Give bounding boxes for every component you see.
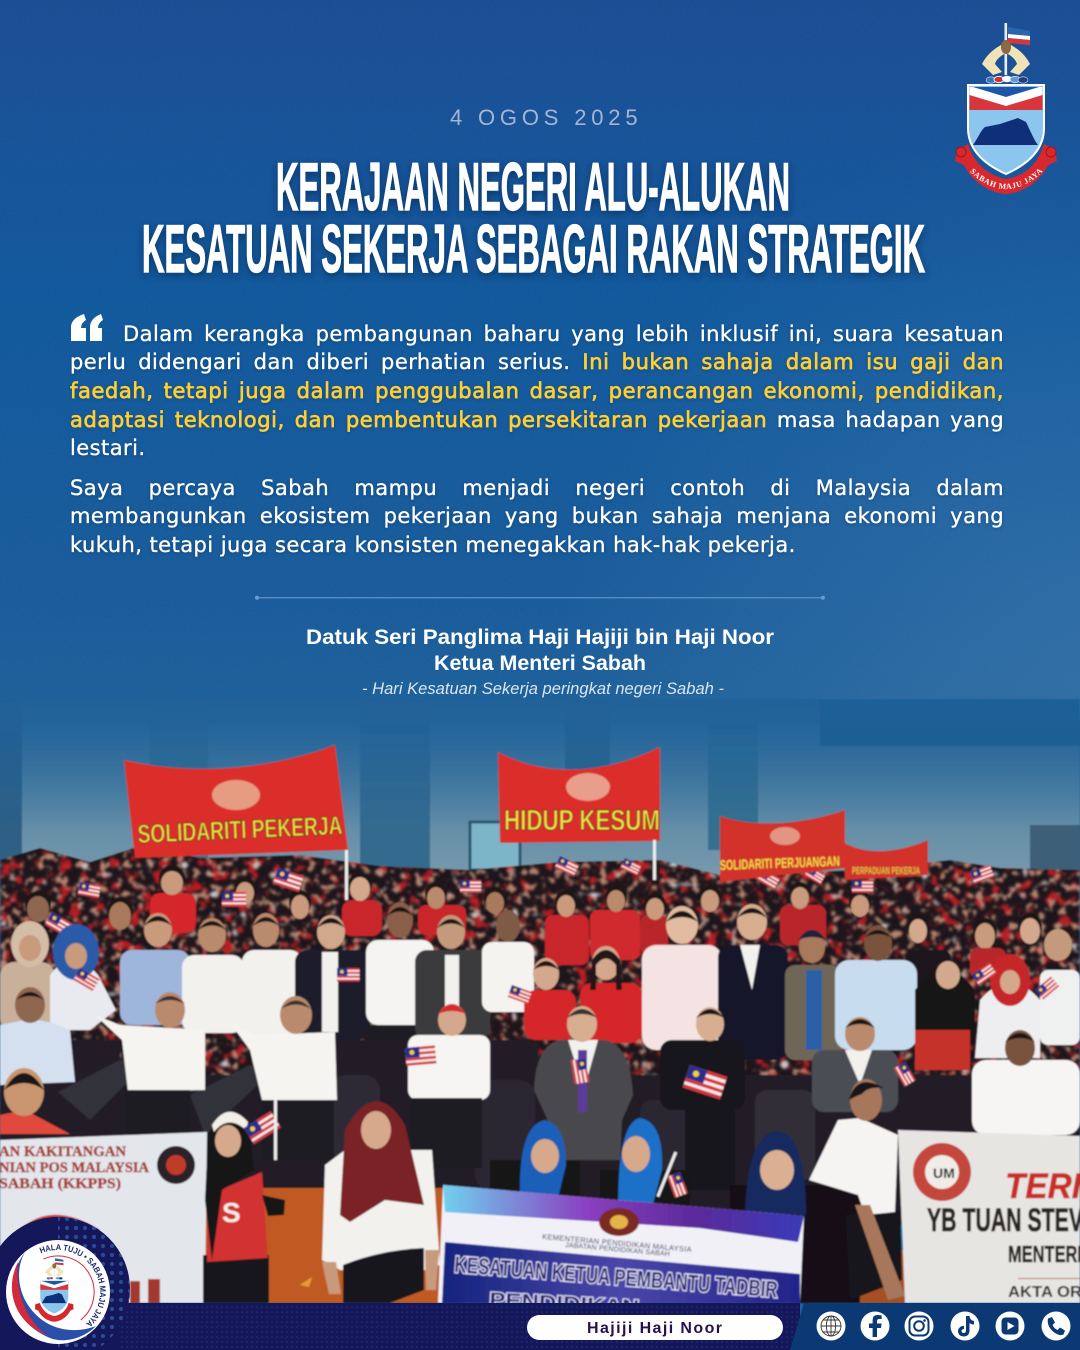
emblem: Sabah coat of arms [955,23,1057,194]
centre banner [438,1185,804,1319]
left white banner: SABAH (KKPPS) [0,1176,121,1192]
divider line [255,596,825,600]
icon: website globe [816,1312,846,1340]
icon: youtube play [996,1312,1024,1340]
banner: solidariti pekerja [124,745,348,900]
icon: phone [1042,1312,1070,1340]
attribution [306,625,775,698]
paragraph two: membangunkan ekosistem pekerjaan yang bukan sahaja menjana ekonomi yang [70,504,1004,528]
seated row of guests [0,987,1080,1190]
paragraph one: faedah, tetapi juga dalam penggubalan dasar, perancangan ekonomi, pendidikan, [70,379,1004,403]
hall wall [0,699,1080,930]
social icons [816,1312,1070,1340]
paragraph one: perlu didengari dan diberi perhatian serius. Ini bukan sahaja dalam isu gaji dan [70,350,1004,374]
woman in red jersey with flag [203,1100,285,1303]
crescent swoosh [12,1252,96,1340]
carpet floor [200,1188,905,1303]
centre banner: KEMENTERIAN PENDIDIKAN MALAYSIA [542,1232,692,1254]
crowd [0,847,1080,1076]
paragraph one: lestari. [70,436,146,460]
banner: rear right: PERPADUAN PEKERJA [852,866,920,877]
small flags in crowd [45,850,994,936]
banner: solidariti pekerja: SOLIDARITI PEKERJA [137,810,343,849]
woman in maroon hijab [322,1101,440,1303]
name pill [527,1315,783,1340]
icon: facebook [860,1312,890,1340]
attribution: - Hari Kesatuan Sekerja peringkat negeri Sabah - [362,680,724,698]
paragraph one: adaptasi teknologi, dan pembentukan persekitaran pekerjaan masa hadapan yang [70,408,1004,432]
centre banner: JABATAN PENDIDIKAN SABAH [565,1242,670,1258]
right white banner: AKTA OR [1008,1284,1080,1301]
emblem small [35,1257,74,1322]
name pill: Hajiji Haji Noor [587,1320,722,1337]
icon: quotation mark [71,314,103,341]
banner: hidup kesum [498,747,660,880]
bottom bar: left navy [0,1303,810,1350]
centre banner: PENDIDIKAN [489,1289,640,1319]
standing row of guests [0,902,1080,1075]
sofas [0,1040,1080,1225]
paragraph two: Saya percaya Sabah mampu menjadi negeri contoh di Malaysia dalam [70,476,1004,500]
right white banner [898,1130,1080,1303]
back row crowd figures [25,865,1042,990]
title [142,149,925,287]
paragraph two [70,476,1004,558]
left white banner: NIAN POS MALAYSIA [0,1160,149,1176]
paragraph one: Dalam kerangka pembangunan baharu yang lebih inklusif ini, suara kesatuan [123,322,1004,346]
emblem: Sabah coat of arms: SABAH MAJU JAYA [970,168,1043,190]
bottom bar: right blue [790,1303,1080,1350]
right white banner: UM [933,1165,955,1181]
banner: solidariti perjuangan [720,810,845,882]
woman in red jersey with flag: S [222,1197,241,1228]
badge: Hala Tuju logo [0,1217,130,1348]
banner: rear right [843,840,928,880]
woman in navy hijab [730,1131,860,1303]
banner: hidup kesum: HIDUP KESUM [504,805,660,837]
paragraph two: kukuh, tetapi juga secara konsisten menegakkan hak-hak pekerja. [70,533,796,557]
badge: Hala Tuju logo: HALA TUJU • SABAH MAJU JAYA [39,1244,106,1326]
seated man in red jersey [0,1068,70,1134]
date: 4 OGOS 2025 [450,105,642,130]
banner: solidariti perjuangan: SOLIDARITI PERJUANGAN [720,853,840,873]
body quote text [70,322,1004,558]
attribution: Ketua Menteri Sabah [434,651,646,675]
attribution: Datuk Seri Panglima Haji Hajiji bin Haji Noor [306,625,775,649]
man in white shirt [809,1079,905,1300]
left white banner [0,1132,207,1303]
centre banner: KESATUAN KETUA PEMBANTU TADBIR [454,1251,779,1302]
event photo [0,699,1080,1319]
icon: instagram [904,1312,934,1340]
left white banner: AN KAKITANGAN [0,1144,126,1160]
paragraph one [70,322,1004,460]
blue hijab women [490,1118,690,1212]
icon: tiktok [950,1312,980,1340]
